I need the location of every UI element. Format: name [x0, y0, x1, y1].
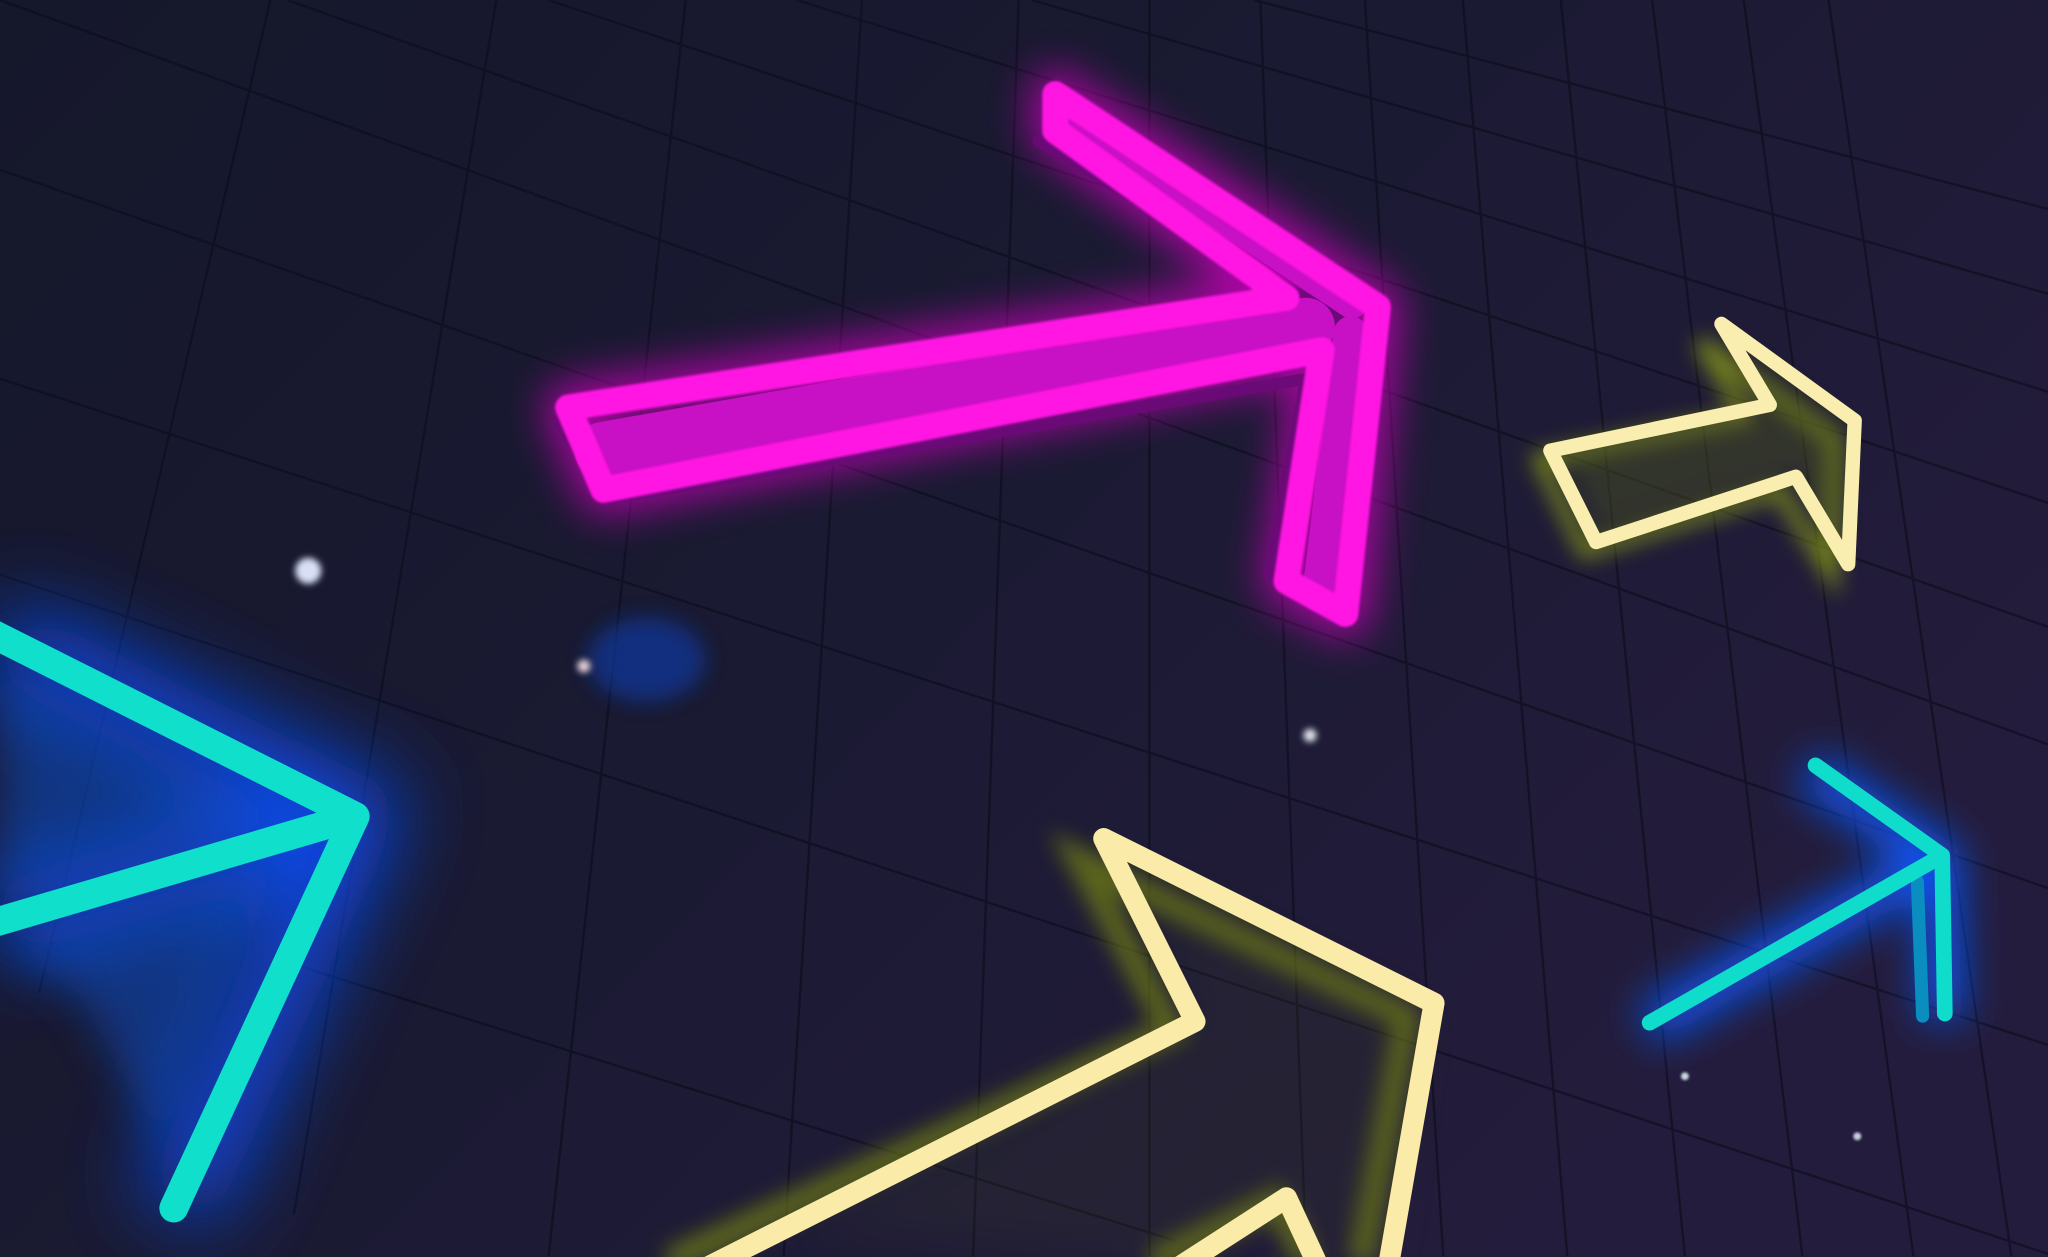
yellow-green glow: bottom arrow — [669, 861, 1407, 1257]
reflection spot: lower right — [1853, 1132, 1861, 1140]
icon: yellow bottom arrow — [695, 839, 1434, 1257]
tile reflections — [295, 558, 1861, 1140]
reflection spot: lower — [1681, 1072, 1689, 1080]
icon: magenta arrow — [559, 94, 1378, 614]
reflection spot: blue patch — [588, 618, 705, 701]
olive fill: small arrow interior — [1567, 353, 1844, 549]
reflection spot: white — [295, 558, 321, 584]
reflection spot: small — [577, 660, 590, 673]
reflection spot: right — [1304, 729, 1317, 742]
icon: cyan left arrow — [0, 631, 355, 1208]
blue glow: small right arrow — [1648, 771, 1944, 1025]
magenta outer glow — [568, 94, 1378, 614]
green glow: small arrow — [1540, 342, 1834, 573]
blue fill: left arrow interior — [0, 666, 294, 1149]
olive fill: bottom arrow inner shadow — [810, 875, 1417, 1256]
icon: yellow small arrow — [1550, 324, 1855, 564]
blue glow: left arrow — [0, 640, 355, 1208]
icon: cyan right arrow — [1650, 765, 1945, 1023]
